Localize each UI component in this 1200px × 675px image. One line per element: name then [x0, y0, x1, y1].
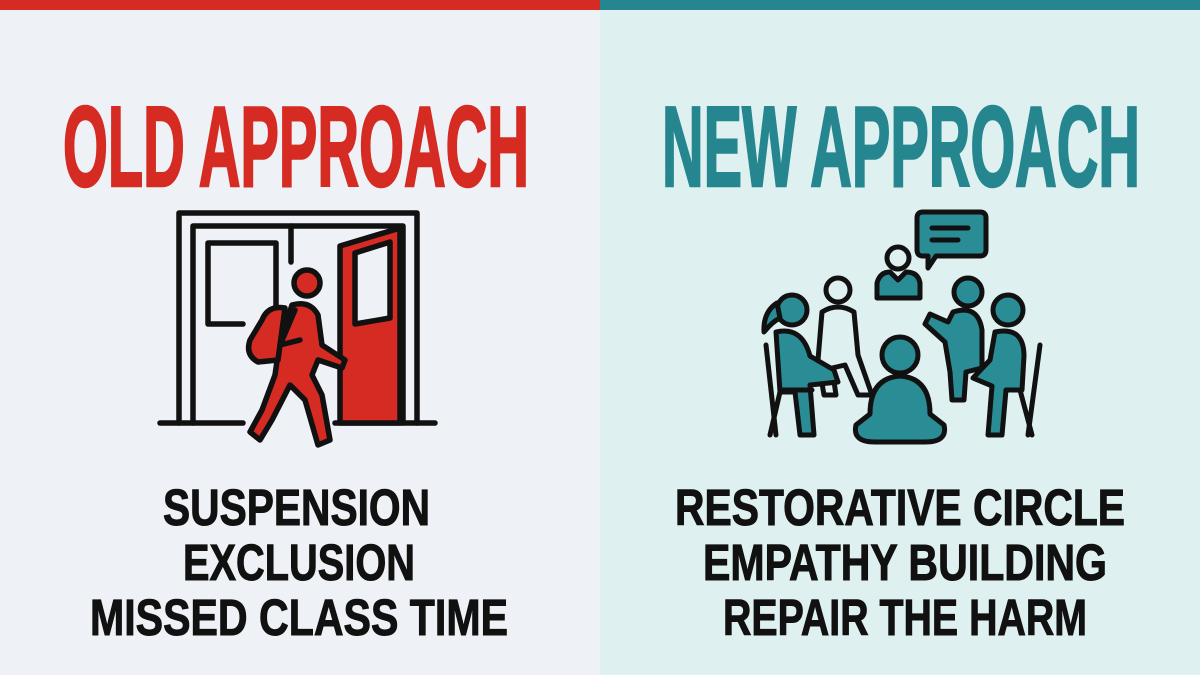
title: old approach: OLD APPROACH: [63, 84, 529, 211]
panel: old approach: [63, 84, 529, 646]
far right person: [993, 295, 1023, 325]
panel: new approach: [662, 84, 1140, 646]
text block: old approach effects: SUSPENSION: [163, 479, 430, 536]
text block: new approach effects: REPAIR THE HARM: [723, 589, 1087, 646]
text block: new approach effects: EMPATHY BUILDING: [703, 534, 1107, 591]
center sitting person: [882, 337, 918, 373]
white person: [826, 278, 850, 302]
text block: old approach effects: EXCLUSION: [183, 534, 415, 591]
right talking person: [954, 278, 982, 306]
text block: old approach effects: MISSED CLASS TIME: [90, 589, 508, 646]
top bar: new approach: [600, 0, 1200, 10]
icon: restorative circle of people: [764, 212, 1040, 442]
top bar: old approach: [0, 0, 600, 10]
speech bubble: [917, 212, 986, 268]
text block: old approach effects: [90, 479, 508, 646]
icon: student leaving through door: [160, 213, 435, 445]
left woman: [777, 295, 807, 325]
text block: new approach effects: [675, 479, 1125, 646]
